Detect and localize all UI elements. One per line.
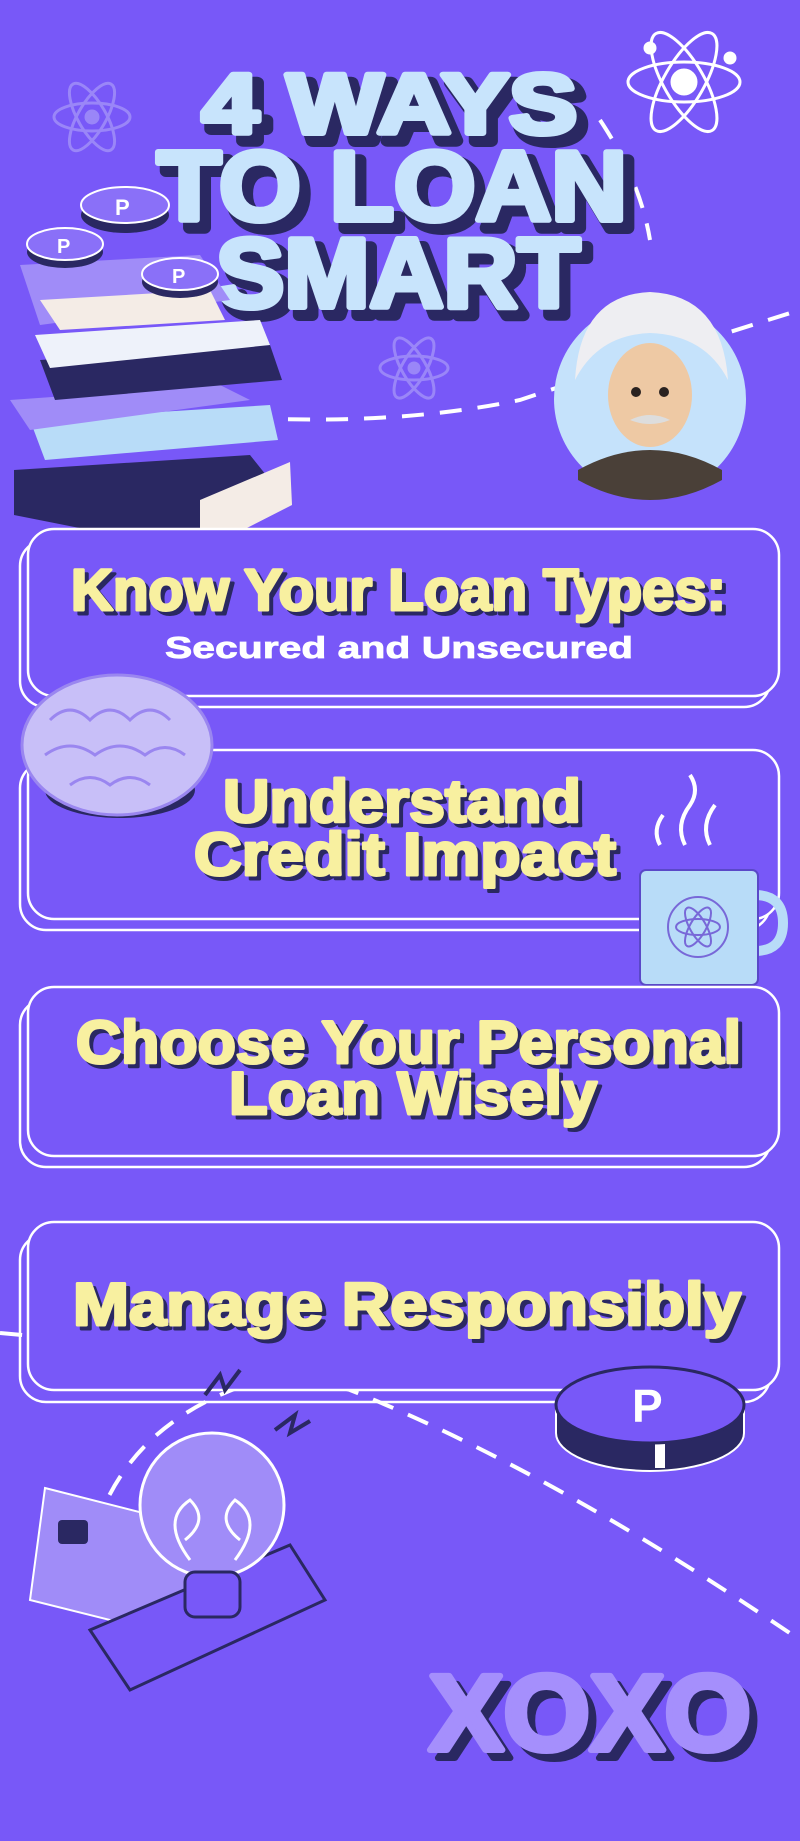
icon: lightbulb with credit card: [30, 1370, 325, 1690]
panel: choose your personal loan: [20, 987, 779, 1167]
heading: understand credit impact: Understand: [227, 772, 585, 839]
heading: choose your personal loan wisely: Loan Wisely: [229, 1060, 598, 1127]
icon: books and coins stack: P: [57, 236, 70, 258]
heading: understand credit impact: Credit Impact: [198, 825, 620, 892]
heading: choose your personal loan wisely: Choose Your Personal: [80, 1013, 745, 1080]
title: TO LOAN: [165, 139, 635, 249]
icon: einstein portrait: [554, 292, 746, 500]
icon: books and coins stack: P: [115, 195, 130, 220]
icon: books and coins stack: P: [172, 266, 185, 288]
panel: manage responsibly: [20, 1222, 779, 1402]
title: 4 WAYS: [202, 57, 577, 151]
title: 4 WAYS: [210, 65, 585, 159]
heading: understand credit impact: Credit Impact: [194, 821, 616, 888]
icon: brain: [22, 675, 212, 818]
heading: choose your personal loan wisely: Loan Wisely: [233, 1064, 602, 1131]
heading: manage responsibly: Manage Responsibly: [73, 1271, 742, 1338]
icon: atom top right: [628, 24, 740, 140]
title: SMART: [224, 226, 588, 336]
title: TO LOAN: [157, 131, 627, 241]
heading: understand credit impact: [194, 768, 620, 892]
sign-off: xoxo: XOXO: [429, 1652, 751, 1773]
icon: books and coins stack: [10, 187, 292, 552]
heading: choose your personal loan wisely: Choose Your Personal: [76, 1009, 741, 1076]
heading: understand credit impact: Understand: [223, 768, 581, 835]
icon: coin: P: [632, 1380, 663, 1432]
heading: know your loan types: Know Your Loan Types:: [71, 558, 726, 623]
heading: know your loan types: Know Your Loan Types:: [75, 562, 730, 627]
panel: understand credit impact: [20, 750, 779, 930]
icon: mug: [640, 775, 783, 985]
sign-off: xoxo: XOXO: [437, 1660, 759, 1781]
subheading: Secured and Unsecured: [165, 630, 633, 665]
icon: faint atom center: [380, 333, 448, 403]
panel: know your loan types: [20, 529, 779, 707]
icon: coin: [556, 1367, 744, 1471]
heading: choose your personal loan wisely: [76, 1009, 745, 1131]
title: SMART: [216, 218, 580, 328]
heading: manage responsibly: Manage Responsibly: [77, 1275, 746, 1342]
icon: faint atom left: [54, 77, 130, 157]
title: [157, 57, 635, 336]
